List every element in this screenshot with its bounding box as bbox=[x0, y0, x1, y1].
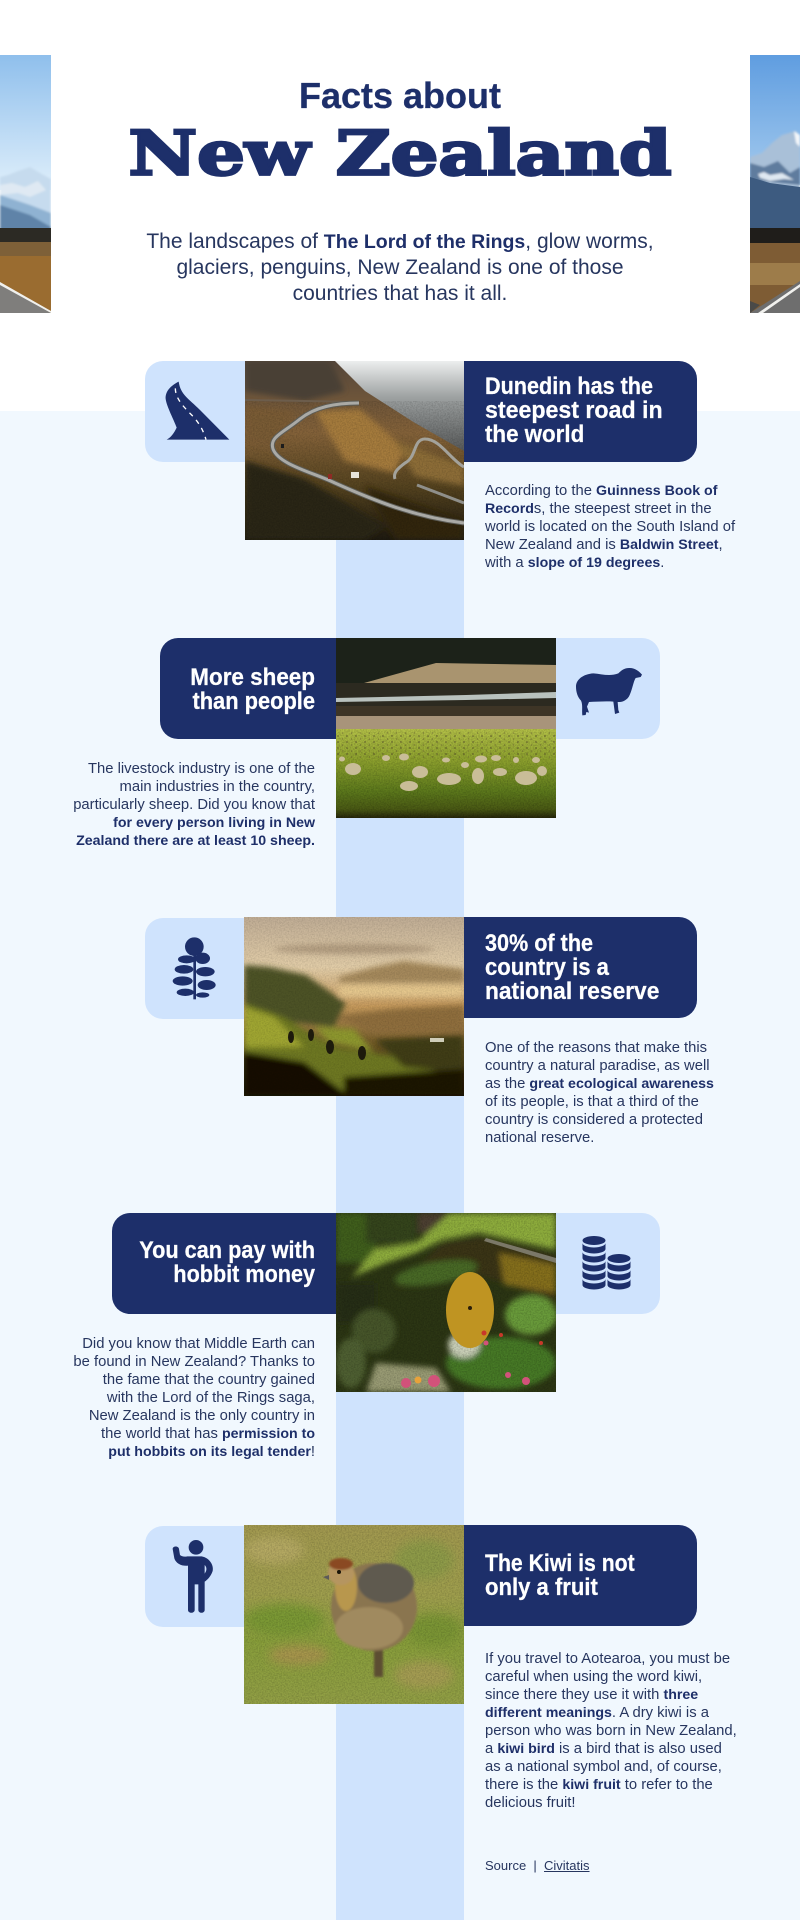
panel: more sheep bbox=[73, 638, 660, 849]
photo: sheep in a field bbox=[336, 638, 556, 818]
heading panel: kiwi: The Kiwi is not bbox=[485, 1550, 635, 1577]
source credit: Source | Civitatis bbox=[485, 1858, 590, 1873]
photo: kiwi chick bbox=[244, 1525, 464, 1704]
body text: more sheep bbox=[73, 761, 315, 849]
icon panel: person bbox=[145, 1526, 255, 1627]
body text: hobbit money: the world that has permission to bbox=[101, 1426, 315, 1442]
heading panel: national reserve: national reserve bbox=[485, 978, 659, 1005]
body text: kiwi: since there they use it with three bbox=[485, 1687, 698, 1703]
icon panel: road bbox=[145, 361, 255, 462]
icon panel: tree bbox=[145, 918, 255, 1019]
panel: kiwi bbox=[145, 1525, 737, 1873]
body text: national reserve: country is considered a protected bbox=[485, 1112, 703, 1128]
photo: mountain road right bbox=[750, 55, 800, 313]
panel: steepest road bbox=[145, 361, 736, 571]
body text: kiwi: delicious fruit! bbox=[485, 1795, 575, 1811]
intro text: The landscapes of The Lord of the Rings, glow worms, bbox=[146, 230, 654, 253]
body text: national reserve: national reserve. bbox=[485, 1130, 594, 1146]
photo: mountain road left bbox=[0, 55, 51, 313]
body text: more sheep: main industries in the country, bbox=[120, 779, 315, 795]
heading panel: more sheep: than people bbox=[192, 688, 315, 715]
body text: steepest road: world is located on the South Island of bbox=[485, 519, 735, 535]
body text: kiwi bbox=[485, 1651, 737, 1811]
body text: steepest road: with a slope of 19 degrees. bbox=[485, 555, 664, 571]
heading: Facts about: Facts about bbox=[299, 75, 501, 116]
body text: kiwi: careful when using the word kiwi, bbox=[485, 1669, 702, 1685]
intro text bbox=[146, 230, 654, 305]
heading panel: hobbit money: hobbit money bbox=[173, 1261, 315, 1288]
body text: steepest road: New Zealand and is Baldwin Street, bbox=[485, 537, 723, 553]
heading panel: national reserve: 30% of the bbox=[485, 930, 593, 957]
body text: kiwi: person who was born in New Zealand, bbox=[485, 1723, 737, 1739]
icon panel: coins bbox=[556, 1213, 660, 1314]
body text: hobbit money bbox=[73, 1336, 315, 1460]
body text: kiwi: a kiwi bird is a bird that is also used bbox=[485, 1741, 722, 1757]
body text: steepest road: Records, the steepest street in the bbox=[485, 501, 712, 517]
heading panel: more sheep bbox=[160, 638, 336, 739]
heading panel: steepest road bbox=[464, 361, 697, 462]
body text: national reserve bbox=[485, 1040, 714, 1146]
body text: national reserve: country a natural paradise, as well bbox=[485, 1058, 710, 1074]
heading panel: national reserve bbox=[464, 917, 697, 1018]
heading panel: national reserve: country is a bbox=[485, 954, 609, 981]
body text: hobbit money: put hobbits on its legal tender! bbox=[108, 1444, 315, 1460]
title bbox=[128, 75, 672, 190]
panel: hobbit money bbox=[73, 1213, 660, 1460]
heading panel: hobbit money bbox=[112, 1213, 336, 1314]
body text: kiwi: If you travel to Aotearoa, you must be bbox=[485, 1651, 730, 1667]
central vertical column bbox=[336, 500, 464, 1920]
body text: steepest road: According to the Guinness Book of bbox=[485, 483, 717, 499]
body text: national reserve: as the great ecological awareness bbox=[485, 1076, 714, 1092]
body text: hobbit money: the fame that the country gained bbox=[103, 1372, 315, 1388]
photo: hobbit house bbox=[336, 1213, 556, 1392]
body text: more sheep: for every person living in New bbox=[113, 815, 315, 831]
heading panel: kiwi bbox=[464, 1525, 697, 1626]
body text: steepest road bbox=[485, 483, 736, 571]
body text: hobbit money: be found in New Zealand? Thanks to bbox=[73, 1354, 315, 1370]
panel: national reserve bbox=[145, 917, 714, 1146]
intro text: glaciers, penguins, New Zealand is one of those bbox=[176, 256, 624, 279]
photo: winding road bbox=[245, 361, 464, 540]
body text: hobbit money: with the Lord of the Rings saga, bbox=[107, 1390, 315, 1406]
body text: more sheep: Zealand there are at least 10 sheep. bbox=[76, 833, 315, 849]
body text: national reserve: of its people, is that a third of the bbox=[485, 1094, 699, 1110]
heading panel: steepest road: the world bbox=[485, 421, 584, 448]
body text: more sheep: The livestock industry is one of the bbox=[88, 761, 315, 777]
heading panel: steepest road: steepest road in bbox=[485, 397, 663, 424]
body text: national reserve: One of the reasons that make this bbox=[485, 1040, 707, 1056]
intro text: countries that has it all. bbox=[293, 282, 507, 305]
body text: hobbit money: Did you know that Middle Earth can bbox=[82, 1336, 315, 1352]
photo: misty green hills bbox=[244, 917, 464, 1096]
body text: hobbit money: New Zealand is the only country in bbox=[89, 1408, 315, 1424]
heading: New Zealand: New Zealand bbox=[128, 118, 672, 190]
body text: kiwi: there is the kiwi fruit to refer to the bbox=[485, 1777, 713, 1793]
heading panel: steepest road: Dunedin has the bbox=[485, 373, 653, 400]
heading panel: more sheep: More sheep bbox=[190, 664, 315, 691]
icon panel: sheep bbox=[556, 638, 660, 739]
body text: more sheep: particularly sheep. Did you know that bbox=[73, 797, 315, 813]
heading panel: kiwi: only a fruit bbox=[485, 1574, 598, 1601]
body text: kiwi: different meanings. A dry kiwi is a bbox=[485, 1705, 709, 1721]
pale blue background band bbox=[0, 411, 800, 1920]
body text: kiwi: as a national symbol and, of course, bbox=[485, 1759, 722, 1775]
heading panel: hobbit money: You can pay with bbox=[139, 1237, 315, 1264]
